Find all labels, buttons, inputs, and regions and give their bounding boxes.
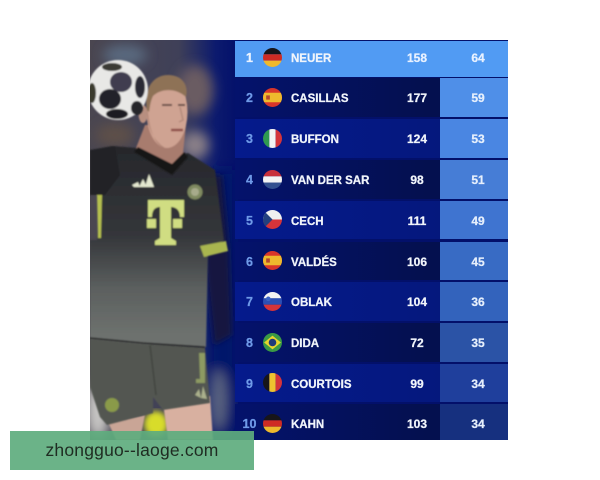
icon: Italy flag xyxy=(263,129,282,148)
table: row 6 Valdes: VALDÉS xyxy=(291,256,337,268)
table: row 2 Casillas: CASILLAS xyxy=(291,93,348,105)
table: row 5 Cech: 111 xyxy=(408,214,426,228)
table: row 8 Dida xyxy=(235,323,508,362)
table: row 8 Dida: 8 xyxy=(246,336,253,350)
icon: Czech flag xyxy=(263,210,282,229)
table: row 4 Van der Sar: VAN DER SAR xyxy=(291,175,369,187)
table: row 7 Oblak: 104 xyxy=(407,295,427,309)
watermark banner: zhongguo--laoge.com xyxy=(45,440,219,460)
right arm xyxy=(205,175,232,345)
table: row 8 Dida: 72 xyxy=(410,336,424,350)
neck and head xyxy=(134,75,188,175)
table: row 2 Casillas xyxy=(235,78,508,117)
icon: Germany flag xyxy=(263,48,282,67)
table: row 7 Oblak: 36 xyxy=(471,295,485,309)
table: row 3 Buffon: BUFFON xyxy=(291,134,339,146)
icon: Spain flag xyxy=(263,88,282,107)
shirt T logo xyxy=(148,200,184,245)
table: row 8 Dida: 35 xyxy=(471,336,485,350)
thigh xyxy=(163,396,213,440)
table: row 10 Kahn: KAHN xyxy=(291,419,324,431)
table: row 7 Oblak xyxy=(235,282,508,320)
icon: Brazil flag xyxy=(263,333,282,352)
table: row 9 Courtois: 99 xyxy=(410,376,424,390)
table: row 10 Kahn: 103 xyxy=(407,417,427,431)
table: row 9 Courtois: COURTOIS xyxy=(291,378,352,390)
table: row 1 Neuer xyxy=(235,41,508,77)
player photo xyxy=(90,40,238,440)
table: row 1 Neuer: 158 xyxy=(407,51,427,65)
table: row 1 Neuer: NEUER xyxy=(291,53,331,65)
icon: Netherlands flag xyxy=(263,170,282,189)
table: row 4 Van der Sar: 51 xyxy=(471,173,485,187)
table: row 9 Courtois: 34 xyxy=(471,376,485,390)
table: row 3 Buffon xyxy=(235,119,508,158)
icon: Spain flag xyxy=(263,251,282,270)
table: row 9 Courtois: 9 xyxy=(246,376,253,390)
watermark banner xyxy=(10,431,254,470)
table: row 5 Cech: 49 xyxy=(471,214,485,228)
table: row 6 Valdes: 106 xyxy=(407,254,427,268)
table: row 10 Kahn: 34 xyxy=(471,417,485,431)
table: row 4 Van der Sar: 4 xyxy=(246,173,253,187)
table: row 2 Casillas: 177 xyxy=(407,91,427,105)
yellow background patch xyxy=(144,411,168,437)
table: row 2 Casillas: 59 xyxy=(471,91,485,105)
jersey xyxy=(90,146,228,347)
infographic image area xyxy=(90,40,508,440)
icon: Belgium flag xyxy=(263,373,282,392)
table: row 5 Cech: CECH xyxy=(291,216,324,228)
table: row 5 Cech: 5 xyxy=(246,214,253,228)
table: row 6 Valdes: 6 xyxy=(246,254,253,268)
table: row 8 Dida: DIDA xyxy=(291,338,319,350)
table: row 5 Cech xyxy=(235,200,508,239)
table: row 3 Buffon: 53 xyxy=(471,132,485,146)
table: row 1 Neuer: 1 xyxy=(246,51,253,65)
table: row 10 Kahn xyxy=(235,404,508,440)
table: row 9 Courtois xyxy=(235,364,508,402)
table: row 2 Casillas: 2 xyxy=(246,91,253,105)
table: row 3 Buffon: 3 xyxy=(246,132,253,146)
table: row 7 Oblak: 7 xyxy=(246,295,253,309)
table: row 3 Buffon: 124 xyxy=(407,132,427,146)
table: row 4 Van der Sar xyxy=(235,160,508,198)
shorts xyxy=(90,338,210,425)
table: row 6 Valdes xyxy=(235,242,508,280)
table: row 1 Neuer: 64 xyxy=(471,51,485,65)
icon: Slovenia flag xyxy=(263,292,282,311)
icon: Germany flag xyxy=(263,414,282,433)
table: row 6 Valdes: 45 xyxy=(471,254,485,268)
football xyxy=(88,60,148,120)
table: row 10 Kahn: 10 xyxy=(243,417,256,431)
table: row 7 Oblak: OBLAK xyxy=(291,297,332,309)
table: row 4 Van der Sar: 98 xyxy=(410,173,424,187)
